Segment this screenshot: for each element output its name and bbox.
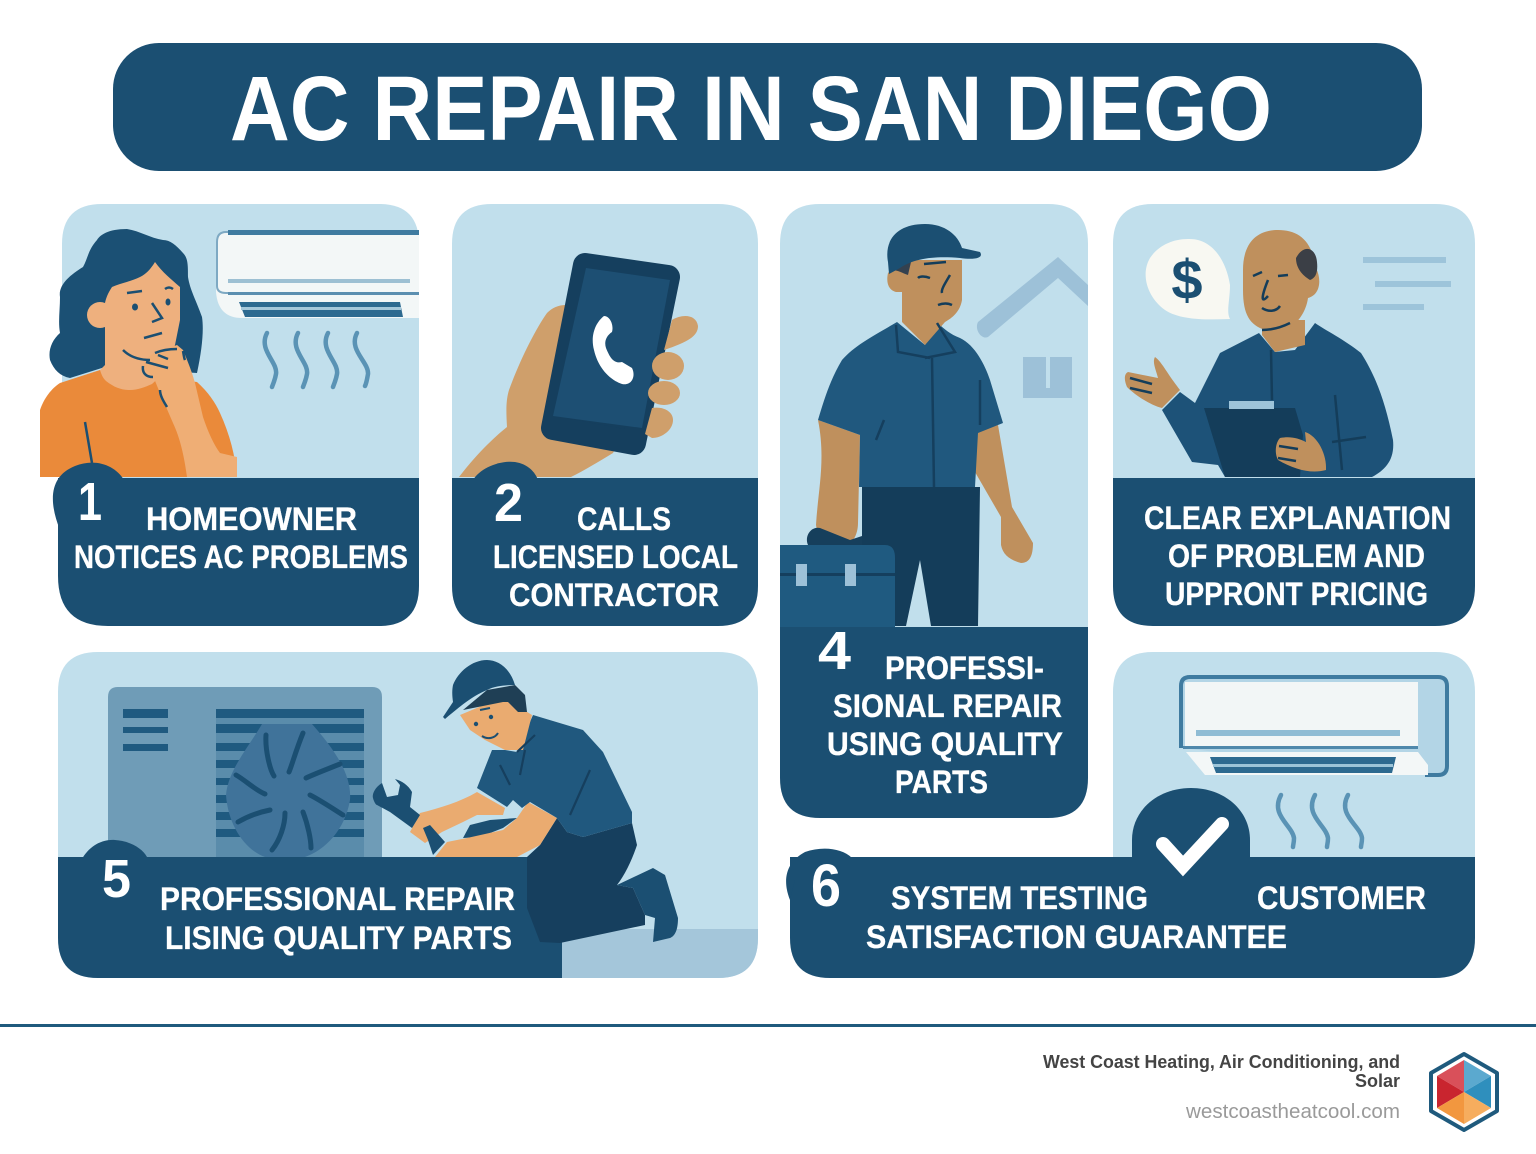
step number 5: 5 [102, 849, 131, 909]
footer company text: Solar [1355, 1071, 1400, 1091]
footer company text: westcoastheatcool.com [1185, 1101, 1400, 1123]
illustration: technician with clipboard [1125, 230, 1393, 477]
footer divider [0, 1024, 1536, 1027]
caption band: PARTS [895, 764, 988, 800]
illustration: outdoor AC unit [108, 687, 382, 857]
caption band: CALLS [577, 501, 671, 537]
illustration: standing technician [780, 224, 1033, 627]
title banner: AC REPAIR IN SAN DIEGO [230, 58, 1272, 160]
caption text [160, 881, 515, 956]
icon: air waves [1278, 795, 1362, 847]
icon: wall air conditioner [216, 230, 419, 318]
panel: step 3 clear explanation and pricing [1113, 204, 1475, 626]
illustration: hand holding phone [459, 265, 698, 477]
caption band [58, 840, 562, 978]
illustration: worried woman [40, 229, 237, 477]
step number 1: 1 [78, 472, 102, 532]
icon: air waves [265, 333, 368, 387]
caption band [53, 463, 419, 626]
caption band: OF PROBLEM AND [1168, 538, 1425, 574]
panel: step 1 homeowner notices problems [40, 204, 419, 626]
caption band: SATISFACTION GUARANTEE [866, 919, 1287, 955]
step number 6: 6 [811, 852, 841, 919]
step number 4: 4 [818, 621, 851, 681]
caption band: CUSTOMER [1257, 880, 1426, 916]
panel: step 4 professional repair technician [780, 204, 1088, 818]
caption band: SYSTEM TESTING [891, 880, 1148, 916]
panel: step 5 outdoor unit repair [58, 652, 758, 978]
icon: text lines [1363, 257, 1451, 310]
illustration: house in background [977, 257, 1088, 398]
caption band: USING QUALITY [827, 726, 1063, 762]
caption band: NOTICES AC PROBLEMS [74, 539, 408, 575]
caption band: CLEAR EXPLANATION [1144, 500, 1451, 536]
icon: dollar speech bubble: $ [1171, 248, 1203, 311]
caption band: SIONAL REPAIR [833, 688, 1062, 724]
caption band [1113, 478, 1475, 626]
caption band: PROFESSI- [885, 650, 1044, 686]
caption band: UPPRONT PRICING [1165, 576, 1428, 612]
panel: step 2 call contractor [452, 204, 758, 626]
caption band: LICENSED LOCAL [493, 539, 738, 575]
caption band [786, 849, 1475, 978]
floor [562, 929, 758, 978]
caption band: CONTRACTOR [509, 577, 719, 613]
panel: step 6 testing and guarantee [786, 652, 1475, 978]
caption band [452, 462, 758, 626]
footer company text [1043, 1052, 1400, 1123]
icon: checkmark badge [1132, 788, 1250, 866]
illustration: kneeling technician [410, 660, 678, 943]
caption band [780, 627, 1088, 818]
icon: wrench [373, 779, 445, 855]
icon: company logo hexagon [1431, 1054, 1497, 1130]
icon: wall air conditioner [1181, 677, 1447, 775]
caption text: LISING QUALITY PARTS [165, 920, 512, 956]
step number 2: 2 [494, 473, 523, 533]
caption band: HOMEOWNER [146, 501, 357, 537]
icon: dollar speech bubble [1146, 239, 1230, 319]
footer company text: West Coast Heating, Air Conditioning, and [1043, 1052, 1400, 1072]
caption text: PROFESSIONAL REPAIR [160, 881, 515, 917]
